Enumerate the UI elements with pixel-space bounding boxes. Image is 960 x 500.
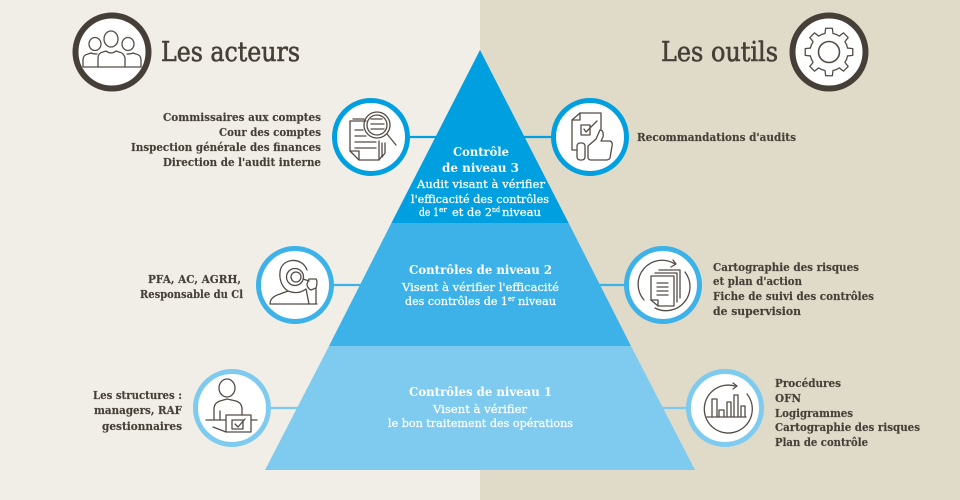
text block: contrôles de niveau 2: er	[508, 295, 516, 303]
text block: contrôles de niveau 1: le bon traitement des opérations	[388, 416, 573, 430]
text block: outils niveau 1: Logigrammes	[775, 406, 853, 420]
pyramid level 1	[265, 346, 695, 470]
text block: contrôle de niveau 3: Contrôle	[453, 144, 509, 159]
text block: outils niveau 2: et plan d'action	[713, 274, 803, 288]
pyramid level 2	[329, 223, 631, 346]
text block: contrôles de niveau 1	[388, 384, 573, 430]
text block: contrôles de niveau 2: des contrôles de 1	[405, 294, 508, 308]
text block: acteurs niveau 1: Les structures :	[93, 388, 182, 402]
text block: acteurs niveau 1	[93, 388, 183, 433]
text block: contrôle de niveau 3: de 1	[419, 205, 439, 219]
text block: acteurs niveau 3: Commissaires aux comptes	[163, 110, 321, 124]
icon: documents cycle	[626, 248, 700, 322]
text block: outils niveau 1: OFN	[775, 391, 801, 405]
icon: person at laptop	[196, 372, 268, 444]
text block: acteurs niveau 1: gestionnaires	[102, 419, 182, 433]
text block: contrôle de niveau 3: Audit visant à vérifier	[416, 177, 546, 191]
text block: acteurs niveau 3	[131, 110, 321, 169]
text block: acteurs niveau 3: Inspection générale des finances	[131, 140, 321, 154]
text block: outils niveau 2	[713, 260, 874, 318]
icon: bar chart cycle	[688, 372, 762, 444]
text block: contrôles de niveau 2	[401, 262, 559, 308]
panel: left background	[0, 0, 480, 500]
text block: outils niveau 1: Cartographie des risques	[775, 420, 920, 434]
text block: acteurs niveau 2	[140, 272, 244, 301]
text block: contrôle de niveau 3: de niveau 3	[442, 160, 519, 175]
text block: outils niveau 1	[775, 376, 920, 449]
text block: acteurs niveau 3: Cour des comptes	[219, 125, 321, 139]
text block: contrôle de niveau 3: niveau	[502, 205, 541, 219]
text block: contrôles de niveau 1: Visent à vérifier	[432, 402, 528, 416]
text block: outils niveau 3: Recommandations d'audits	[637, 130, 796, 144]
text block: contrôle de niveau 3: er	[439, 206, 448, 214]
heading: les acteurs icon	[76, 16, 148, 88]
pyramid	[265, 50, 695, 470]
text block: outils niveau 2: Fiche de suivi des contrôles	[713, 289, 874, 303]
panel: right background	[480, 0, 960, 500]
connector lines	[265, 137, 695, 408]
text block: outils niveau 1: Plan de contrôle	[775, 435, 868, 449]
icon: documents and magnifier	[334, 100, 408, 174]
text block: contrôles de niveau 2: niveau	[518, 294, 556, 308]
icon: person with magnifier	[258, 248, 332, 322]
text block: contrôles de niveau 2: Visent à vérifier l'efficacité	[401, 280, 559, 294]
text block: acteurs niveau 2: Responsable du Cl	[140, 287, 244, 301]
text block: outils niveau 2: Cartographie des risques	[713, 260, 859, 274]
text block: acteurs niveau 3: Direction de l'audit interne	[163, 155, 321, 169]
heading: les outils icon	[792, 16, 866, 88]
text block: contrôle de niveau 3: nd	[492, 206, 500, 214]
text block: contrôle de niveau 3: et de 2	[452, 205, 492, 219]
pyramid level 3	[391, 50, 569, 223]
text block: acteurs niveau 1: managers, RAF	[94, 403, 183, 417]
text block: contrôles de niveau 1: Contrôles de niveau 1	[409, 384, 552, 399]
text block: outils niveau 2: de supervision	[713, 304, 802, 318]
text block: contrôle de niveau 3: l'efficacité des contrôles	[411, 192, 549, 206]
heading: les acteurs: Les acteurs	[161, 37, 300, 68]
icon: recommendation thumb up	[554, 100, 626, 174]
text block: contrôle de niveau 3	[411, 144, 549, 219]
text block: acteurs niveau 2: PFA, AC, AGRH,	[148, 272, 241, 286]
text block: contrôles de niveau 2: Contrôles de niveau 2	[409, 262, 552, 277]
heading: les outils: Les outils	[661, 37, 778, 68]
text block: outils niveau 1: Procédures	[775, 376, 841, 390]
